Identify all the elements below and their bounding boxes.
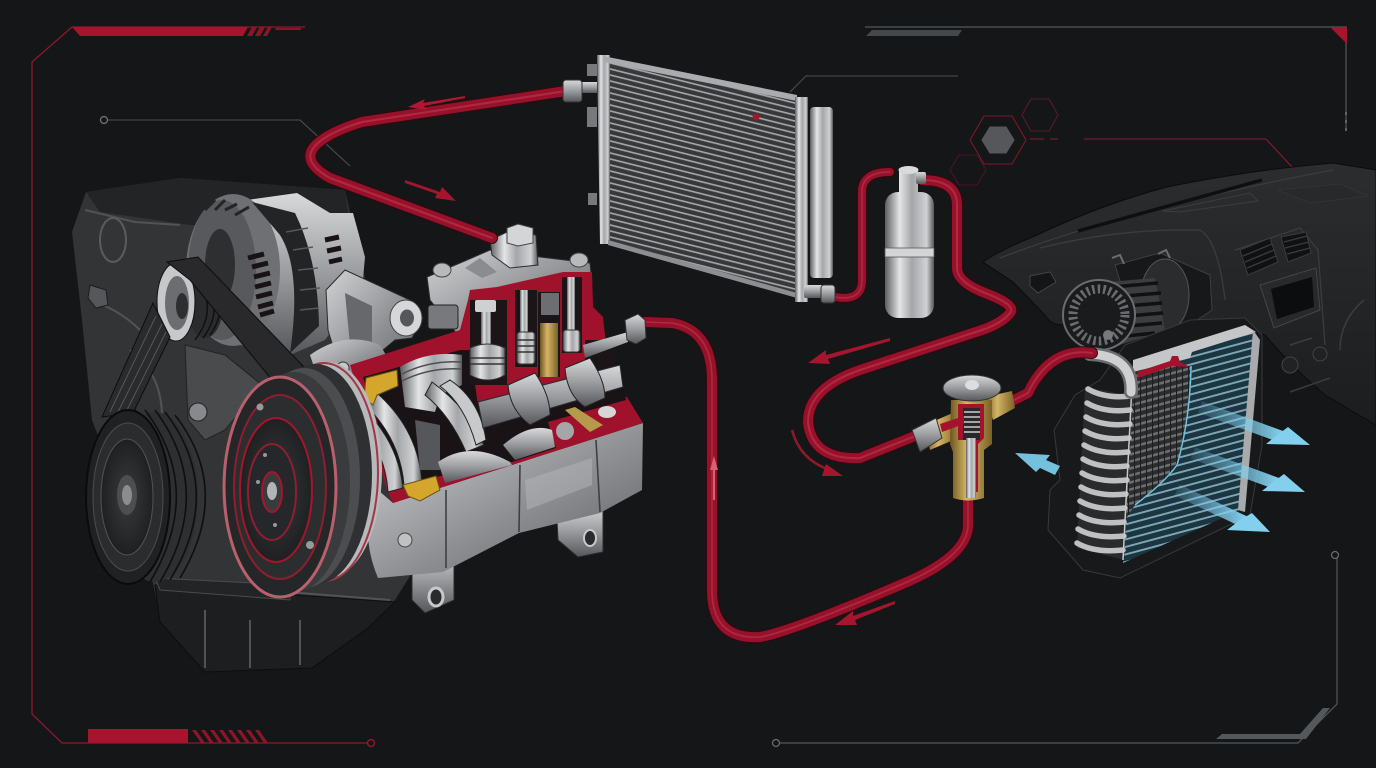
hexagon decoration bbox=[950, 99, 1292, 185]
upper piston bbox=[400, 354, 462, 412]
shaft bearings bbox=[508, 373, 550, 425]
compressor outlet fitting bbox=[625, 314, 646, 344]
dashboard bbox=[983, 163, 1376, 425]
compressor head bbox=[427, 224, 592, 350]
valve cap bbox=[943, 375, 1001, 401]
compressor cutaway bbox=[350, 272, 643, 503]
alternator bbox=[186, 193, 365, 355]
cold air arrow: middle bbox=[1193, 453, 1305, 492]
cold air arrows bbox=[1015, 407, 1310, 532]
receiver drier bbox=[885, 166, 934, 318]
condenser mounting brackets bbox=[587, 64, 597, 205]
clutch rim bbox=[274, 362, 382, 578]
suction valves bbox=[481, 310, 491, 350]
silver elbow bbox=[1090, 354, 1131, 392]
outlet tube in wall bbox=[583, 332, 628, 358]
clutch face bbox=[224, 377, 336, 597]
refrigerant outlet fitting on head bbox=[490, 232, 538, 268]
refrigerant pipe: drier to expansion valve bbox=[808, 180, 1011, 458]
evaporator tube stack bbox=[1077, 387, 1133, 560]
expansion valve bbox=[912, 375, 1015, 500]
clutch housing bbox=[310, 339, 395, 385]
flow arrow: suction line bbox=[835, 601, 895, 625]
callout line: condenser bbox=[790, 76, 958, 92]
side nuts bbox=[985, 391, 1015, 420]
outlet fitting bbox=[804, 285, 835, 303]
lower right valve parts bbox=[565, 407, 603, 432]
idler pulley bbox=[157, 263, 223, 341]
frame: top right corner bbox=[865, 27, 1347, 131]
compressor mounting foot: front bbox=[412, 545, 454, 613]
flow arrow: liquid line bbox=[808, 338, 890, 364]
frame: left bracket bbox=[32, 27, 374, 746]
crankshaft pulley bbox=[86, 410, 205, 584]
flow arrow: vertical suction bbox=[710, 456, 718, 500]
refrigerant pipe: condenser to drier bbox=[835, 172, 890, 298]
drive shaft bbox=[478, 365, 623, 428]
flow arrow: curved return bbox=[792, 430, 843, 476]
dashboard screen bbox=[1260, 268, 1320, 328]
mounting bracket bbox=[326, 270, 423, 385]
receiver tube bbox=[810, 107, 833, 278]
cold air arrow: lower bbox=[1177, 490, 1270, 532]
inlet fitting bbox=[563, 80, 597, 102]
evaporator bbox=[1048, 318, 1262, 578]
compressor mounting foot: rear bbox=[557, 505, 603, 557]
valve chambers bbox=[470, 277, 615, 385]
brass body bbox=[950, 400, 992, 500]
compressor body bbox=[310, 339, 643, 613]
flow arrow: to condenser return bbox=[408, 96, 465, 110]
refrigerant pipe: evaporator outlet to compressor bbox=[645, 322, 968, 637]
bracket caps bbox=[428, 305, 458, 329]
alternator dark band bbox=[252, 202, 319, 353]
condenser bbox=[563, 55, 835, 303]
dashboard controls bbox=[1282, 357, 1298, 373]
alternator vents bbox=[248, 254, 274, 315]
dashboard vents bbox=[1240, 238, 1278, 275]
accessory belt bbox=[102, 257, 305, 600]
refrigerant pipe: expansion valve to evaporator bbox=[1010, 352, 1092, 402]
swash plate bbox=[350, 405, 403, 492]
yellow clips bbox=[364, 370, 398, 405]
refrigerant pipe: compressor to condenser bbox=[310, 91, 566, 238]
engine block bbox=[72, 178, 420, 672]
intake air arrow bbox=[1015, 453, 1060, 475]
frame: bottom right corner bbox=[772, 552, 1338, 746]
cold air arrow: upper bbox=[1200, 407, 1310, 445]
callout line: engine bbox=[100, 116, 350, 166]
compressor clutch pulley bbox=[224, 362, 382, 597]
flow arrow: discharge line bbox=[405, 180, 456, 201]
brass valve bbox=[540, 323, 558, 377]
tensioner bracket bbox=[185, 345, 262, 440]
blower fan bbox=[1063, 250, 1212, 350]
